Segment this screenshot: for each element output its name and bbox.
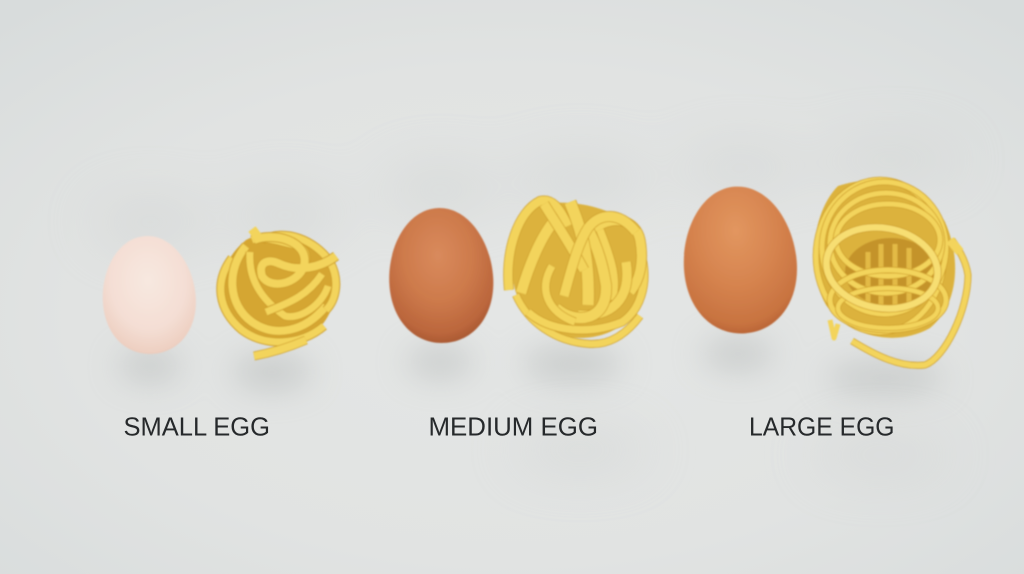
large egg <box>679 183 801 337</box>
small egg <box>98 233 200 357</box>
label: medium egg: MEDIUM EGG <box>428 412 598 442</box>
nest centre <box>845 238 937 306</box>
soft shadows <box>90 138 965 475</box>
nest base <box>814 181 955 338</box>
pasta rings <box>816 180 946 332</box>
medium pasta nest <box>508 200 644 344</box>
small pasta nest <box>221 229 336 356</box>
nest base <box>511 203 644 338</box>
nest base <box>222 233 335 343</box>
label: large egg: LARGE EGG <box>749 412 894 442</box>
medium egg <box>386 205 496 346</box>
large pasta nest <box>814 180 968 365</box>
label: small egg: SMALL EGG <box>124 412 270 442</box>
